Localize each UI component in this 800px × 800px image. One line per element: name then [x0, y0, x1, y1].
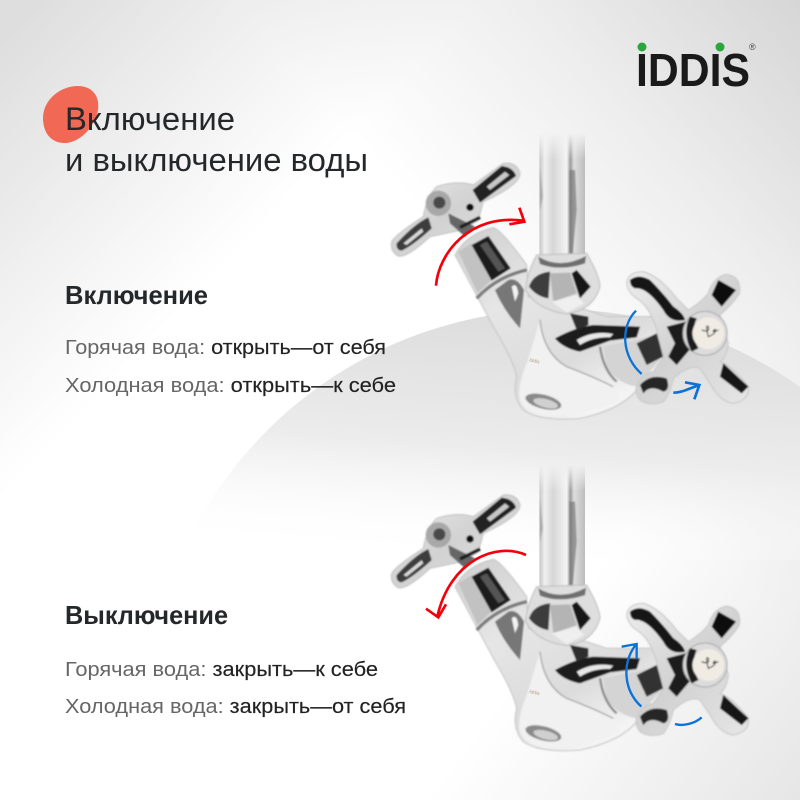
arrow: blue, closing: [622, 644, 641, 707]
heading: turning off: Выключение: [65, 600, 228, 630]
background circle: [180, 310, 800, 560]
arrow: red, closing: [426, 551, 526, 617]
arrow: blue arc, closing: [675, 717, 702, 725]
title: [65, 101, 368, 178]
section: turning off: [65, 600, 406, 718]
text: hot water on: Горячая вода: открыть—от себя: [65, 337, 386, 359]
arrow: blue arc, opening: [625, 311, 642, 374]
text: hot water off: Горячая вода: закрыть—к себе: [65, 659, 378, 681]
heading: turning on: Включение: [65, 280, 208, 310]
arrow: blue, opening: [673, 382, 699, 399]
logo: IDDIS: ®: [749, 42, 756, 52]
text: cold water off: Холодная вода: закрыть—от себя: [65, 696, 406, 718]
section: turning on: [65, 280, 396, 397]
logo: IDDIS: IDDIS: [636, 44, 750, 96]
faucet illustration: off: [391, 465, 748, 751]
arrow: red, opening: [436, 208, 524, 286]
text: cold water on: Холодная вода: открыть—к себе: [65, 375, 396, 397]
title: Включение: [65, 101, 235, 137]
accent blob: [43, 86, 98, 143]
faucet illustration: on: [391, 133, 748, 419]
title: и выключение воды: [65, 142, 368, 178]
